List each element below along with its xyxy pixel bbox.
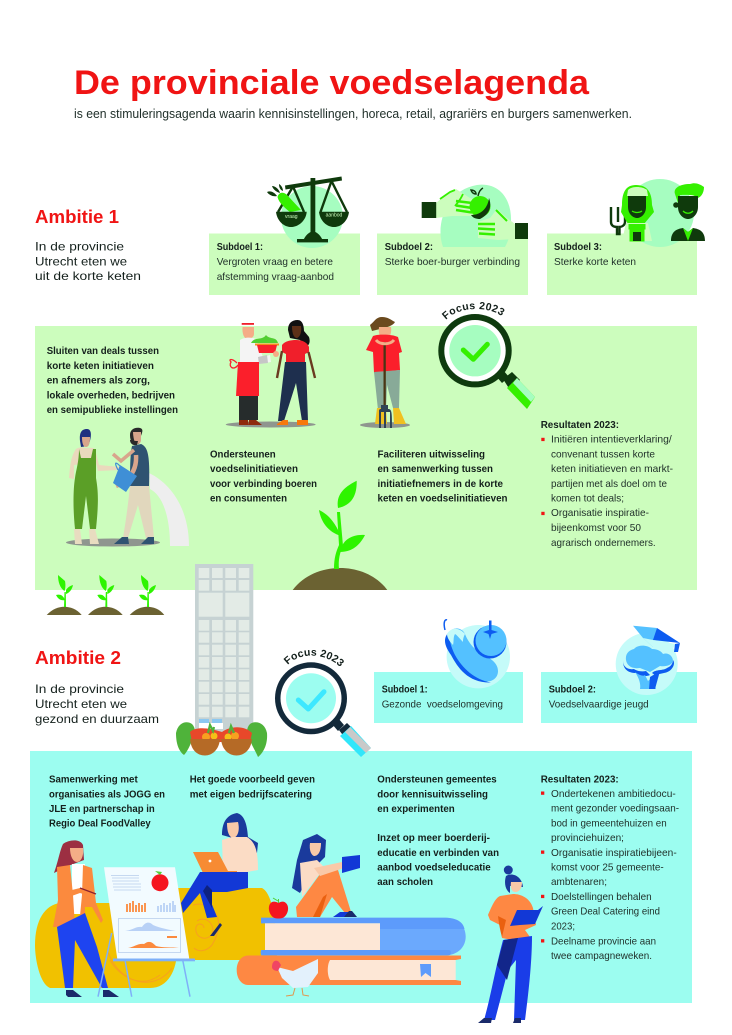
icon: hands exchanging apple [422,185,528,247]
subtitle: is een stimuleringsagenda waarin kennisinstellingen, horeca, retail, agrariërs en burgers samenwerken. [74,107,632,121]
illustration: chicken [272,959,318,996]
text: goede voorbeeld: met eigen bedrijfscatering [190,790,312,800]
text: subdoel 3 ambitie 1: Sterke korte keten [554,257,636,268]
text: deals: en semipublieke instellingen [47,405,178,416]
panel: ambitie 2 main [30,751,692,1003]
illustration: big seedling [293,481,387,590]
title: De provinciale voedselagenda [74,64,590,102]
illustration: small seedling 1 [47,575,82,615]
panel: subdoel 1 box ambitie 2 [374,672,523,723]
text: subdoel 2 ambitie 1: Subdoel 2: [385,242,433,253]
text: resultaten 2023 ambitie 2 [541,774,679,962]
panel: subdoel 2 box ambitie 2 [541,672,697,723]
panel: subdoel 3 box [547,234,697,295]
text: deals: Sluiten van deals tussen [47,346,159,357]
text: ondersteunen gemeentes: aan scholen [377,877,433,888]
text: faciliteren: initiatiefnemers in de korte [378,479,503,490]
text: faciliteren: keten en voedselinitiatieven [378,494,508,504]
icon: scales: vraag [285,214,298,220]
illustration: reading woman [292,834,360,917]
text: ondersteunen gemeentes: Inzet op meer boerderij- [377,833,491,844]
text: subdoel 2 ambitie 1 [385,242,520,268]
text: ondersteunen gemeentes [377,774,499,888]
icon: scales: aanbod [326,212,343,218]
text: samenwerking: organisaties als JOGG en [49,790,165,800]
text: resultaten 2023 ambitie 1: Resultaten 2023: [541,420,619,431]
text: faciliteren: Faciliteren uitwisseling [378,450,485,460]
text: deals: korte keten initiatieven [47,361,154,372]
text: ondersteunen gemeentes: educatie en verbinden van [377,848,499,859]
text: resultaten 2023 ambitie 2: Deelname provincie aan [551,936,656,948]
icon: magnifier focus 2023 green [438,302,535,409]
text: Ambitie 1 description [35,240,141,283]
illustration: chef and woman with pot [226,318,316,428]
text: faciliteren [378,450,508,504]
text: resultaten 2023 ambitie 1: komen tot deals; [551,494,624,504]
text: subdoel 3 ambitie 1: Subdoel 3: [554,242,602,253]
text: resultaten 2023 ambitie 1: bijeenkomst voor 50 [551,523,641,534]
text: Ambitie 2 description: Utrecht eten we [35,697,127,711]
text: subdoel 1 ambitie 1: Subdoel 1: [217,242,263,253]
text: goede voorbeeld [190,774,315,800]
text: resultaten 2023 ambitie 1: Initiëren intentieverklaring/ [551,434,672,446]
text: resultaten 2023 ambitie 2: ment gezonder voedingsaan- [551,804,679,815]
panel: ambitie 1 main [35,326,697,590]
text: ondersteunen gemeentes: Ondersteunen gemeentes [377,774,497,786]
text: faciliteren: en samenwerking tussen [378,464,493,475]
icon: magnifier focus 2023 blue: Focus 2023 [284,650,344,666]
text: deals [47,346,178,416]
text: samenwerking: Samenwerking met [49,774,138,786]
text: resultaten 2023 ambitie 2: Doelstellingen behalen [551,892,652,903]
text: resultaten 2023 ambitie 2: twee campagneweken. [551,951,652,962]
text: subdoel 1 ambitie 1: Vergroten vraag en betere [217,257,333,268]
text: deals: en afnemers als zorg, [47,376,150,386]
text: subdoel 1 ambitie 2: Subdoel 1: [382,685,428,696]
text: ondersteunen gemeentes: en experimenten [377,804,455,815]
text: subdoel 3 ambitie 1 [554,242,636,268]
text: goede voorbeeld: Het goede voorbeeld geven [190,774,315,786]
text: Ambitie 2 description: gezond en duurzaam [35,712,159,726]
panel: subdoel 1 box [209,234,360,295]
text: ondersteunen gemeentes: door kennisuitwisseling [377,790,488,800]
text: resultaten 2023 ambitie 2: Organisatie inspiratiebijeen- [551,848,677,859]
text: resultaten 2023 ambitie 1 [541,420,673,549]
text: subdoel 2 ambitie 2: Voedselvaardige jeugd [549,700,649,711]
text: ondersteunen: Ondersteunen [210,450,276,460]
text: subdoel 1 ambitie 1: afstemming vraag-aanbod [217,272,334,283]
text: samenwerking [49,774,165,830]
illustration: books stack [237,918,466,985]
icon: eggplant and tomato [444,620,510,688]
text: Ambitie 1 description: Utrecht eten we [35,254,127,268]
text: subdoel 1 ambitie 2 [382,685,503,711]
text: resultaten 2023 ambitie 1: agrarisch ondernemers. [551,538,656,549]
text: resultaten 2023 ambitie 2: komst voor 25 gemeente- [551,862,664,874]
illustration: apple on book [269,898,288,919]
text: resultaten 2023 ambitie 1: partijen met als doel om te [551,479,667,490]
text: resultaten 2023 ambitie 2: provinciehuizen; [551,833,624,844]
illustration: hay bales [35,888,277,988]
text: ondersteunen: voor verbinding boeren [210,479,317,490]
text: deals: lokale overheden, bedrijven [47,390,175,402]
text: subdoel 2 ambitie 1: Sterke boer-burger verbinding [385,257,520,268]
text: resultaten 2023 ambitie 1: convenant tussen korte [551,450,655,460]
heading: Ambitie 1: Ambitie 1 [35,206,119,227]
icon: magnifier focus 2023 green: Focus 2023 [442,302,504,320]
text: resultaten 2023 ambitie 1: Organisatie inspiratie- [551,508,649,519]
panel: subdoel 2 box [377,234,528,295]
text: ondersteunen: en consumenten [210,494,287,504]
heading: Ambitie 2: Ambitie 2 [35,647,121,668]
text: subdoel 2 ambitie 2: Subdoel 2: [549,685,596,696]
text: ondersteunen gemeentes: aanbod voedseleducatie [377,862,491,874]
illustration: presenter woman [53,840,119,997]
illustration: farmer with fork [360,317,410,428]
illustration: vegetable baskets [176,722,267,757]
illustration: small seedling 3 [130,575,164,615]
illustration: standing woman with book [478,866,543,1023]
text: resultaten 2023 ambitie 2: Resultaten 2023: [541,774,619,786]
text: subdoel 1 ambitie 1 [217,242,334,283]
text: resultaten 2023 ambitie 2: Green Deal Catering eind [551,907,660,918]
illustration: building [195,564,253,734]
text: ondersteunen [210,450,317,504]
text: samenwerking: Regio Deal FoodValley [49,818,151,830]
text: subdoel 2 ambitie 2 [549,685,649,711]
text: resultaten 2023 ambitie 2: 2023; [551,922,575,932]
text: ondersteunen: voedselinitiatieven [210,464,298,475]
icon: farmer and citizen [611,179,705,247]
illustration: farmer woman and man [66,428,189,546]
text: resultaten 2023 ambitie 2: Ondertekenen ambitiedocu- [551,789,676,800]
text: resultaten 2023 ambitie 1: keten initiatieven en markt- [551,464,673,475]
illustration: small seedling 2 [88,575,123,615]
illustration: presentation board [98,867,195,997]
text: Ambitie 2 description [35,682,159,726]
text: resultaten 2023 ambitie 2: bod in gemeentehuizen en [551,818,667,830]
text: samenwerking: JLE en partnerschap in [49,804,155,815]
icon: broccoli with graduation cap [616,626,680,695]
icon: magnifier focus 2023 blue [275,650,371,757]
icon: scales [267,176,349,248]
text: Ambitie 2 description: In de provincie [35,682,124,696]
text: resultaten 2023 ambitie 2: ambtenaren; [551,877,607,888]
text: Ambitie 1 description: In de provincie [35,240,124,254]
text: Ambitie 1 description: uit de korte keten [35,269,141,283]
text: subdoel 1 ambitie 2: Gezonde voedselomgeving [382,700,503,711]
illustration: woman with laptop [181,813,258,936]
